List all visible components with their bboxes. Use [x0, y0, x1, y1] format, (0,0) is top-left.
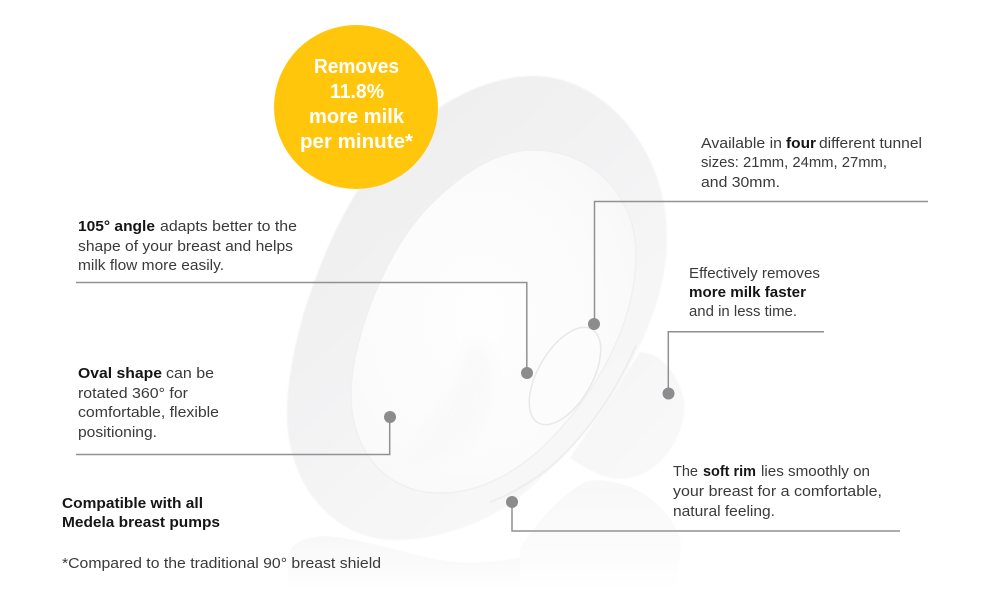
- callout: oval shape: can be: [166, 366, 214, 382]
- callout: soft rim: natural feeling.: [673, 504, 775, 520]
- heading: compatibility note: [62, 496, 220, 531]
- callout: more milk faster: more milk faster: [689, 285, 806, 301]
- callout: more milk faster: [662, 266, 824, 400]
- callout: four tunnel sizes: four: [786, 136, 816, 152]
- badge: removes 11.8% more milk: Removes: [314, 56, 399, 78]
- callout: soft rim: soft rim: [703, 464, 756, 480]
- callout: four tunnel sizes: different tunnel: [819, 136, 922, 152]
- reflection of the shield: [287, 480, 681, 590]
- badge: removes 11.8% more milk: [274, 25, 438, 189]
- callout: four tunnel sizes: and 30mm.: [701, 175, 780, 191]
- badge: removes 11.8% more milk: per minute*: [300, 131, 413, 153]
- rim highlight: [490, 345, 636, 502]
- inner shading of the funnel: [385, 340, 492, 472]
- tunnel: [570, 352, 684, 479]
- callout: soft rim: [506, 464, 900, 531]
- callout: 105 degree angle: [76, 219, 533, 379]
- callout: oval shape: [76, 366, 396, 454]
- heading: compatibility note: Compatible with all: [62, 496, 203, 512]
- footnote: *Compared to the traditional 90° breast shield: [62, 556, 381, 572]
- callout: 105 degree angle: adapts better to the: [160, 219, 297, 235]
- outer flange: [287, 76, 667, 540]
- callout: more milk faster: and in less time.: [689, 304, 797, 320]
- callout: soft rim: The: [673, 464, 698, 480]
- badge: removes 11.8% more milk: more milk: [309, 106, 405, 128]
- callout: 105 degree angle: milk flow more easily.: [78, 258, 224, 274]
- callout: oval shape: rotated 360° for: [78, 386, 188, 402]
- callout: oval shape: comfortable, flexible: [78, 405, 219, 421]
- callout: four tunnel sizes: Available in: [701, 136, 782, 152]
- badge: removes 11.8% more milk: 11.8%: [330, 81, 384, 103]
- heading: compatibility note: Medela breast pumps: [62, 515, 220, 531]
- callout: oval shape: positioning.: [78, 425, 157, 441]
- callout: soft rim: lies smoothly on: [761, 464, 870, 480]
- callout: more milk faster: Effectively removes: [689, 266, 820, 282]
- callout: 105 degree angle: 105° angle: [78, 219, 155, 235]
- callout: four tunnel sizes: [588, 136, 928, 330]
- product photo: breast shield: [287, 76, 684, 590]
- callout: oval shape: Oval shape: [78, 366, 162, 382]
- tunnel opening ring: [515, 316, 615, 436]
- callout: four tunnel sizes: sizes: 21mm, 24mm, 27mm,: [701, 155, 887, 171]
- inner cup: [351, 150, 636, 493]
- callout: 105 degree angle: shape of your breast and helps: [78, 239, 293, 255]
- callout: soft rim: your breast for a comfortable,: [673, 484, 882, 500]
